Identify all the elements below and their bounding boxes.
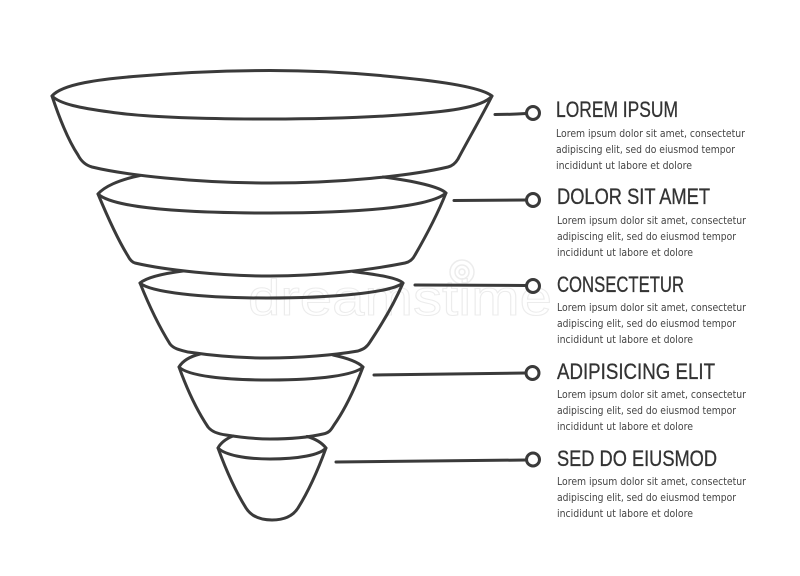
- connector 1: [495, 106, 540, 120]
- connector 3: [415, 280, 540, 292]
- text block 4: adipiscing elit, sed do eiusmod tempor: [557, 405, 737, 417]
- text block 1: LOREM IPSUM: [556, 97, 678, 122]
- text block 4: ADIPISICING ELIT: [557, 359, 715, 384]
- text block 4: [557, 359, 747, 433]
- funnel tier 3: [140, 271, 403, 358]
- text block 5: Lorem ipsum dolor sit amet, consectetur: [557, 476, 747, 488]
- text block 5: incididunt ut labore et dolore: [557, 508, 693, 520]
- text block 1: adipiscing elit, sed do eiusmod tempor: [556, 144, 736, 156]
- text block 1: Lorem ipsum dolor sit amet, consectetur: [556, 128, 746, 140]
- funnel tier 1: [52, 70, 492, 183]
- text block 1: incididunt ut labore et dolore: [556, 160, 692, 172]
- text block 3: Lorem ipsum dolor sit amet, consectetur: [557, 302, 747, 314]
- funnel tier 5: [218, 436, 326, 520]
- funnel tier 2: [98, 176, 446, 276]
- text block 4: incididunt ut labore et dolore: [557, 421, 693, 433]
- funnel: [52, 70, 492, 520]
- watermark: dreamstime: [248, 270, 552, 326]
- text block 2: Lorem ipsum dolor sit amet, consectetur: [557, 215, 747, 227]
- text block 2: adipiscing elit, sed do eiusmod tempor: [557, 231, 737, 243]
- connector 2: [454, 194, 540, 206]
- text block 4: Lorem ipsum dolor sit amet, consectetur: [557, 389, 747, 401]
- text block 2: incididunt ut labore et dolore: [557, 247, 693, 259]
- text block 5: adipiscing elit, sed do eiusmod tempor: [557, 492, 737, 504]
- connector 4: [374, 366, 539, 380]
- text block 3: adipiscing elit, sed do eiusmod tempor: [557, 318, 737, 330]
- text block 5: [557, 446, 747, 520]
- text block 3: [557, 272, 747, 346]
- text block 1: [556, 97, 746, 172]
- text block 3: incididunt ut labore et dolore: [557, 334, 693, 346]
- text block 2: [557, 184, 747, 259]
- connector 5: [336, 453, 540, 466]
- funnel tier 4: [179, 354, 363, 439]
- text block 3: CONSECTETUR: [557, 272, 684, 297]
- text block 2: DOLOR SIT AMET: [557, 184, 710, 209]
- text block 5: SED DO EIUSMOD: [557, 446, 717, 471]
